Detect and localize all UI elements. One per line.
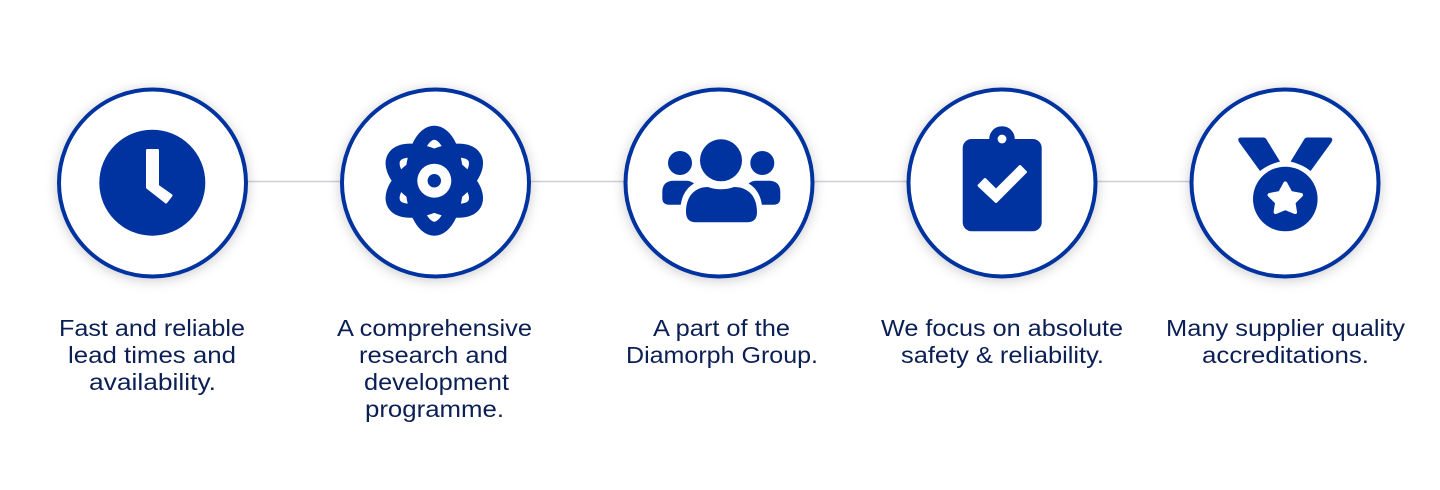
text: accreditations: accreditations. (1202, 342, 1369, 368)
text: group: Diamorph Group. (626, 342, 818, 368)
circle: research (342, 90, 529, 276)
text: research (337, 315, 532, 422)
text: safety: We focus on absolute (881, 315, 1123, 341)
text: lead times: lead times and (68, 342, 236, 368)
circle: group (626, 90, 812, 276)
text: group: A part of the (653, 315, 790, 341)
text: safety: safety & reliability. (901, 342, 1104, 368)
text: research: programme. (365, 396, 504, 422)
icon: clipboard check (963, 126, 1042, 231)
icon: medal (1238, 138, 1332, 231)
text: research: development (364, 369, 509, 395)
text: lead times: availability. (89, 369, 216, 395)
text: research: A comprehensive (337, 315, 532, 341)
text: research: research and (359, 342, 508, 368)
connector line (240, 180, 1200, 182)
text: lead times (59, 315, 245, 395)
circle: safety (908, 90, 1096, 276)
text: accreditations (1166, 315, 1405, 368)
text: lead times: Fast and reliable (59, 315, 245, 341)
text: group (626, 315, 818, 368)
circle: accreditations (1192, 90, 1378, 276)
icon: people (662, 139, 780, 222)
icon: clock (99, 130, 205, 236)
icon: atom (383, 133, 486, 229)
text: safety (881, 315, 1123, 368)
circle: lead times (59, 90, 246, 276)
text: accreditations: Many supplier quality (1166, 315, 1405, 341)
